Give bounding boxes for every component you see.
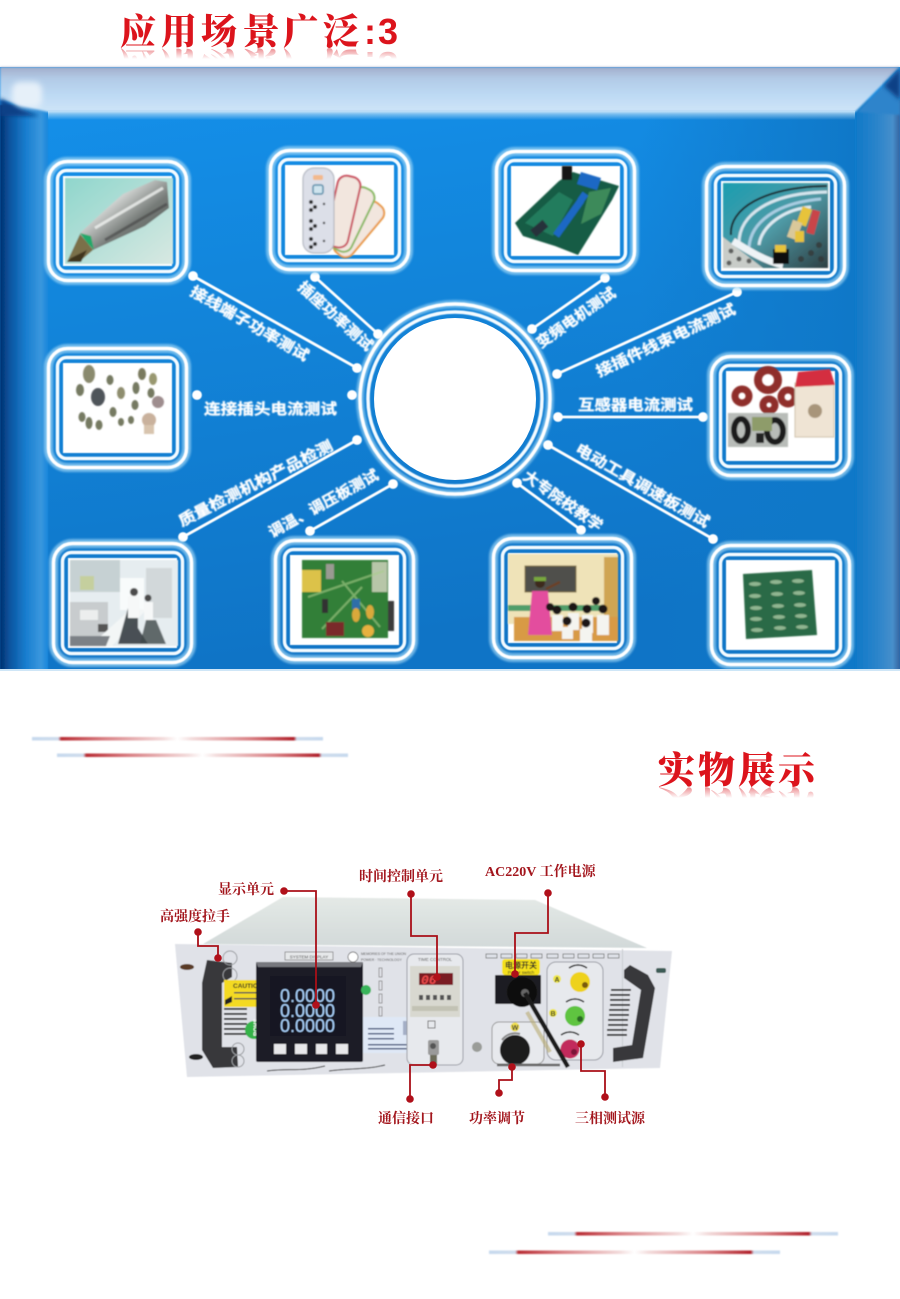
frame: cables: [706, 166, 844, 286]
title: 应用场景广泛: [120, 12, 359, 52]
scene labels: 插座功率测试: [294, 278, 377, 355]
callout: three phase: 三相测试源: [575, 1110, 646, 1127]
callout: time control: 时间控制单元: [359, 868, 443, 885]
display unit: 0.0000: [280, 1016, 335, 1036]
caution label: CAUTION: [233, 983, 263, 990]
panel markings: MEMORIES OF THE UNION: [361, 952, 407, 956]
left handle: [202, 960, 238, 1068]
callout: handle: 高强度拉手: [160, 908, 230, 925]
left vent: [224, 1008, 247, 1035]
frame: terminal block: [48, 162, 186, 280]
device front panel: [175, 944, 672, 1077]
connector lines: [180, 272, 740, 542]
ROHS badge: ROHS: [254, 1019, 260, 1036]
callout: power input: [485, 863, 597, 978]
title: [120, 11, 398, 85]
three phase terminals: [547, 962, 603, 1060]
scene labels: 大专院校教学: [520, 467, 606, 535]
heading: product display: 实物展示: [658, 750, 819, 792]
top slots: [486, 954, 619, 958]
heading: product display: 实物展示: [658, 782, 819, 824]
scene labels: 质量检测机构产品检测: [175, 437, 336, 530]
display unit: [256, 962, 363, 1062]
frame: connectors: [48, 348, 186, 468]
spec label: [363, 1017, 423, 1053]
frame: circuit boards: [712, 546, 850, 664]
three phase terminals: B: [550, 1011, 556, 1018]
ROHS badge: [245, 1019, 263, 1039]
frame: transformers: [712, 356, 850, 476]
scene labels: 调温、调压板测试: [265, 466, 382, 541]
panel markings: [267, 952, 407, 1071]
scene labels: 互感器电流测试: [578, 396, 693, 414]
right vent: [607, 989, 631, 1036]
W knob box: W: [512, 1025, 519, 1032]
callout: power adjust: 功率调节: [469, 1110, 525, 1127]
power switch: [495, 959, 541, 1007]
scene labels: 变频电机测试: [533, 284, 619, 352]
panel markings: SYSTEM DISPLAY: [290, 954, 328, 960]
scene labels: 电动工具调速板测试: [572, 440, 713, 531]
scene labels: 接线端子功率测试: [187, 282, 312, 365]
small rings left: [223, 951, 244, 1067]
scene labels: [175, 278, 739, 541]
time control unit: TIME CONTROL: [418, 957, 452, 962]
callout: time control: [359, 868, 443, 981]
device photo: [175, 897, 672, 1077]
decorative rule lines top: [32, 737, 348, 757]
frame: power strips: [270, 150, 408, 270]
right handle: [613, 965, 655, 1062]
frame: lab: [54, 544, 192, 662]
W knob box: [472, 1022, 544, 1065]
panel markings: POWER · TECHNOLOGY: [361, 958, 402, 962]
panel: application scenes: [0, 67, 900, 671]
callout: three phase: [575, 1040, 646, 1127]
device top face: [203, 897, 647, 948]
time control unit: [407, 954, 463, 1065]
display unit: 0.0000: [280, 986, 335, 1006]
scene labels: 接插件线束电流测试: [593, 300, 739, 381]
title: :3: [364, 44, 398, 85]
time control unit: 06: [421, 973, 437, 988]
heading: product display: [658, 750, 819, 824]
power switch: Power switch: [508, 970, 535, 975]
three phase terminals: A: [554, 977, 560, 984]
display unit: 0.0000: [280, 1001, 335, 1021]
frame: drive board: [496, 152, 634, 270]
title: 应用场景广泛: [120, 44, 359, 84]
scene labels: 连接插头电流测试: [204, 400, 337, 418]
callout: comm port: 通信接口: [378, 1110, 434, 1127]
caution label: [224, 980, 263, 1007]
power switch: 电源开关: [505, 960, 537, 970]
decorative rule lines bottom: [489, 1232, 838, 1254]
callout: power input: AC220V 工作电源: [485, 863, 597, 880]
center circle: [360, 304, 550, 494]
frame: control board: [276, 540, 414, 660]
callout: handle: [160, 908, 230, 962]
callout: power adjust: [469, 1063, 525, 1127]
BNC connector: [428, 1040, 439, 1065]
power cable: [525, 993, 568, 1067]
callout: display: 显示单元: [218, 881, 274, 898]
frame: classroom: [494, 538, 632, 658]
title: :3: [364, 11, 398, 52]
callouts: [160, 863, 646, 1127]
callout: display: [218, 881, 320, 1009]
callout: comm port: [378, 1061, 437, 1127]
